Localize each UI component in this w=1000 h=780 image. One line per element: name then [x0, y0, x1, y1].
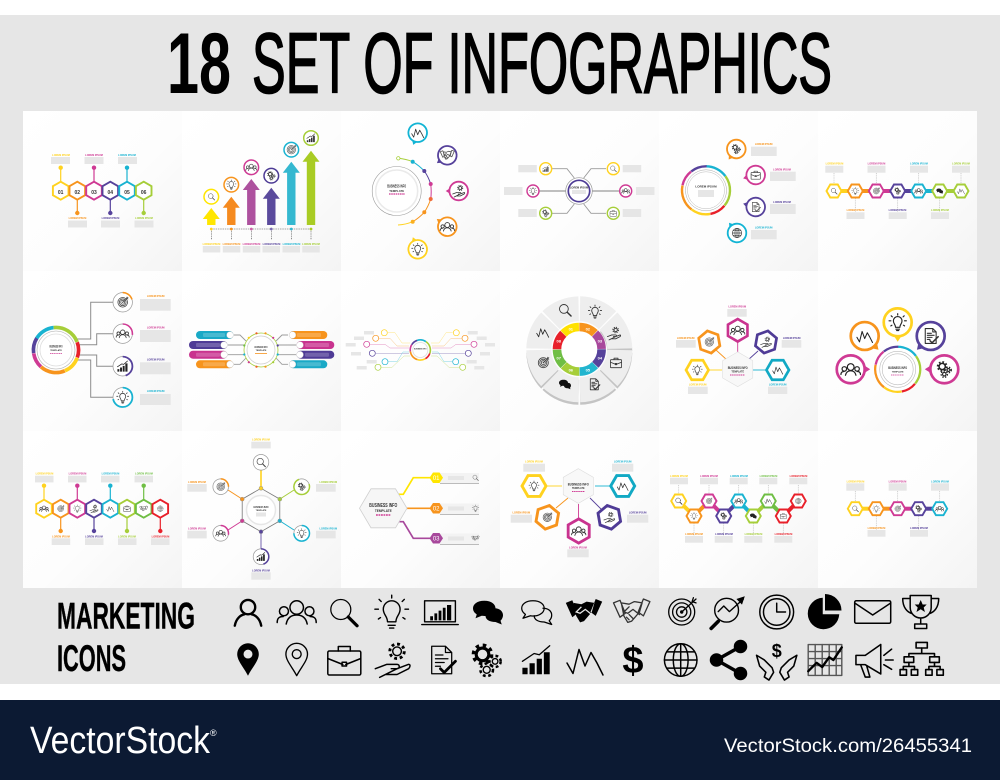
panel: rainbow circle with four bubbles: LOREM IPSUM	[755, 226, 773, 230]
panel: arc with speech-bubble icons: BUSINESS INFO	[387, 184, 407, 188]
panel: rainbow circle with four bubbles: LOREM IPSUM	[773, 168, 791, 172]
panel: hexagon hub with six circles: LOREM IPSUM	[252, 439, 270, 442]
panel: segmented wheel 01-08: 05	[586, 367, 591, 372]
panel: segmented wheel 01-08: 06	[569, 367, 574, 372]
panel: segmented wheel 01-08: 08	[556, 338, 562, 343]
panel: hub with six satellite circles: LOREM IPSUM	[570, 186, 588, 190]
panel: segmented wheel 01-08	[500, 271, 659, 431]
panel: central hexagon with five hexagons below: LOREM IPSUM	[614, 460, 632, 464]
panel: eight-step hexagon timeline: LOREM IPSUM	[85, 536, 103, 538]
panel: seven-step horizontal hex timeline: LOREM IPSUM	[826, 162, 843, 166]
panel: zigzag hexagon timeline: LOREM IPSUM	[775, 533, 792, 536]
panel: central hexagon with five hexagons above	[659, 271, 818, 431]
panel: rainbow hub branching to four circles: LOREM IPSUM	[147, 358, 165, 362]
panel: eight-step hexagon timeline: LOREM IPSUM	[102, 472, 119, 476]
panel: five-step hexagon timeline: LOREM IPSUM	[847, 480, 864, 484]
title: 18	[167, 16, 231, 112]
panel: hexagon timeline 01-06: 06	[141, 190, 147, 196]
panel: rainbow circle with four bubbles	[659, 111, 818, 271]
panel: circuit-line hub	[341, 271, 500, 431]
panel: five-step hexagon timeline: LOREM IPSUM	[868, 527, 885, 530]
panel: hexagon timeline 01-06: 03	[91, 190, 97, 196]
panel: five-step hexagon timeline	[818, 431, 977, 588]
panel: zigzag hexagon timeline: LOREM IPSUM	[670, 475, 688, 478]
panel: zigzag hexagon timeline: LOREM IPSUM	[685, 533, 703, 536]
panel: zigzag hexagon timeline: LOREM IPSUM	[730, 475, 748, 478]
panel: rising arrows chart: LOREM IPSUM	[302, 243, 320, 246]
panel: central hexagon with five hexagons below: LOREM IPSUM	[629, 512, 647, 515]
panel: central hexagon with five hexagons above: LOREM IPSUM	[783, 337, 801, 340]
panel: rainbow circle with four bubbles: LOREM IPSUM	[755, 143, 773, 146]
icon set: marketing icons: $	[622, 640, 644, 682]
panel: zigzag hexagon timeline: LOREM IPSUM	[715, 533, 733, 536]
footer logo: VectorStock: ®	[210, 728, 217, 738]
panel: eight-step hexagon timeline: LOREM IPSUM	[152, 536, 169, 538]
panel: hexagon hub with six circles	[182, 431, 341, 588]
panel: rainbow hub branching to four circles	[13, 271, 182, 431]
panel: hexagon with three numbered tabs: 03	[433, 536, 440, 542]
footer band	[0, 700, 1000, 780]
panel: eight-step hexagon timeline: LOREM IPSUM	[118, 536, 136, 538]
panel: central hexagon with five hexagons below: BUSINESS INFO	[568, 482, 589, 486]
panel: hexagon timeline 01-06: LOREM IPSUM	[52, 154, 70, 157]
panel: segmented wheel 01-08: 07	[556, 355, 562, 360]
panel: hexagon hub with six circles: BUSINESS INFO	[254, 505, 269, 509]
panel: rainbow hub branching to four circles: LOREM IPSUM	[147, 390, 165, 393]
panel: central hexagon with five hexagons below: LOREM IPSUM	[512, 512, 530, 515]
panel: rainbow circle with five large bubbles: TEMPLATE	[892, 370, 904, 374]
panel: rainbow hub branching to four circles: LOREM IPSUM	[147, 326, 165, 330]
panel: five-step hexagon timeline: LOREM IPSUM	[931, 480, 949, 484]
panel: rising arrows chart	[182, 111, 341, 271]
panel: segmented wheel 01-08: 03	[598, 338, 603, 343]
panel: hexagon hub with six circles: LOREM IPSUM	[319, 528, 337, 531]
panel: hexagon timeline 01-06: 04	[108, 190, 113, 196]
panel: hexagon timeline 01-06: 01	[58, 190, 64, 196]
panel: hub with six satellite circles	[500, 111, 659, 271]
panel: five-step hexagon timeline: LOREM IPSUM	[910, 527, 928, 530]
panel: rising arrows chart: LOREM IPSUM	[283, 243, 300, 246]
panel: eight-step hexagon timeline: LOREM IPSUM	[69, 472, 86, 476]
panel: arc with speech-bubble icons	[341, 111, 500, 271]
icon set: marketing icons	[235, 594, 943, 682]
panel: central hexagon with five hexagons below: LOREM IPSUM	[569, 546, 587, 549]
panel: seven-step horizontal hex timeline	[818, 111, 977, 271]
panel: hexagon timeline 01-06: LOREM IPSUM	[69, 217, 86, 220]
panel: rainbow hub branching to four circles: BUSINESS INFO	[50, 344, 63, 348]
panel: rising arrows chart: LOREM IPSUM	[243, 243, 260, 246]
panel: segmented wheel 01-08: 02	[586, 326, 591, 331]
panel: seven-step horizontal hex timeline: LOREM IPSUM	[868, 162, 885, 166]
panel: hexagon timeline 01-06	[23, 111, 182, 271]
panel: hexagon timeline 01-06: LOREM IPSUM	[118, 154, 136, 157]
panel: rainbow hub branching to four circles: TEMPLATE	[50, 349, 62, 352]
panel: zigzag hexagon timeline: LOREM IPSUM	[760, 475, 777, 478]
panel: central hexagon with five hexagons above: BUSINESS INFO	[728, 366, 748, 370]
heading: marketing icons: MARKETING	[57, 595, 195, 636]
panel: rainbow circle with four bubbles: LOREM IPSUM	[773, 201, 791, 204]
panel: hexagon with three numbered tabs: BUSINESS INFO	[369, 503, 398, 509]
panel: eight-step hexagon timeline: LOREM IPSUM	[52, 536, 70, 538]
panel: zigzag hexagon timeline: LOREM IPSUM	[700, 475, 718, 478]
panel: hub with eight pill bars: TEMPLATE	[256, 349, 267, 352]
panel: central hexagon with five hexagons below: LOREM IPSUM	[525, 460, 543, 464]
panel: eight-step hexagon timeline: LOREM IPSUM	[36, 472, 53, 476]
panel: hexagon with three numbered tabs: TEMPLATE	[375, 509, 392, 513]
panel: rainbow circle with five large bubbles: BUSINESS INFO	[888, 366, 907, 370]
panel: rainbow hub branching to four circles: LOREM IPSUM	[147, 295, 165, 298]
panel: rising arrows chart: LOREM IPSUM	[223, 243, 240, 246]
panel: seven-step horizontal hex timeline: LOREM IPSUM	[889, 209, 906, 212]
panel: hexagon timeline 01-06: LOREM IPSUM	[135, 217, 153, 220]
panel: hub with eight pill bars	[182, 271, 341, 431]
panel: central hexagon with five hexagons below	[500, 431, 659, 588]
panel: central hexagon with five hexagons above: LOREM IPSUM	[769, 384, 787, 387]
panel: seven-step horizontal hex timeline: LOREM IPSUM	[847, 209, 864, 212]
panel: hexagon with three numbered tabs	[341, 431, 500, 588]
panel: central hexagon with five hexagons above: LOREM IPSUM	[728, 306, 746, 309]
panel: central hexagon with five hexagons above: LOREM IPSUM	[677, 337, 695, 340]
panel: five-step hexagon timeline: LOREM IPSUM	[889, 480, 906, 484]
panel: seven-step horizontal hex timeline: LOREM IPSUM	[931, 209, 949, 212]
panel: segmented wheel 01-08: 01	[569, 326, 574, 331]
panel: hexagon hub with six circles: TEMPLATE	[256, 509, 267, 512]
panel: central hexagon with five hexagons below: TEMPLATE	[572, 487, 585, 490]
panel: hexagon with three numbered tabs: 01	[433, 476, 440, 482]
panel: hexagon hub with six circles: LOREM IPSUM	[252, 569, 270, 572]
panel: zigzag hexagon timeline: LOREM IPSUM	[790, 475, 807, 478]
title	[167, 16, 832, 112]
panel: eight-step hexagon timeline: LOREM IPSUM	[135, 472, 153, 476]
footer logo: VectorStock: VectorStock	[30, 720, 211, 762]
panel: segmented wheel 01-08: 04	[598, 355, 603, 360]
panel: seven-step horizontal hex timeline: LOREM IPSUM	[952, 162, 970, 166]
heading: marketing icons	[57, 595, 195, 679]
icon set: marketing icons: $	[772, 641, 782, 661]
panel: hub with eight pill bars: BUSINESS INFO	[254, 345, 268, 349]
panel: hexagon timeline 01-06: LOREM IPSUM	[102, 217, 119, 220]
panel: hexagon hub with six circles: LOREM IPSUM	[188, 481, 206, 484]
panel: hexagon timeline 01-06: LOREM IPSUM	[85, 154, 103, 157]
panel: hexagon timeline 01-06: 02	[75, 190, 80, 196]
panel: hexagon hub with six circles: LOREM IPSUM	[188, 528, 206, 531]
panel: central hexagon with five hexagons above: TEMPLATE	[731, 370, 744, 374]
panel: hexagon timeline 01-06: 05	[124, 190, 130, 196]
panel: hexagon with three numbered tabs: 02	[433, 506, 440, 512]
panel: seven-step horizontal hex timeline: LOREM IPSUM	[910, 162, 928, 166]
panel: arc with speech-bubble icons: TEMPLATE	[389, 189, 404, 193]
panel: rising arrows chart: LOREM IPSUM	[203, 243, 220, 246]
panel: circuit-line hub: BUSINESS INFO	[414, 348, 427, 350]
panel: zigzag hexagon timeline: LOREM IPSUM	[745, 533, 762, 536]
heading: marketing icons: ICONS	[57, 638, 126, 679]
panel: rainbow circle with five large bubbles	[818, 271, 977, 431]
panel: rainbow circle with four bubbles: LOREM IPSUM	[695, 184, 717, 188]
footer image id: VectorStock.com/26455341	[724, 736, 972, 757]
panel: central hexagon with five hexagons above: LOREM IPSUM	[689, 384, 707, 387]
panel: hexagon hub with six circles: LOREM IPSUM	[319, 481, 337, 484]
panel: zigzag hexagon timeline	[659, 431, 818, 588]
panel: eight-step hexagon timeline	[23, 431, 182, 588]
panel: rising arrows chart: LOREM IPSUM	[263, 243, 280, 246]
